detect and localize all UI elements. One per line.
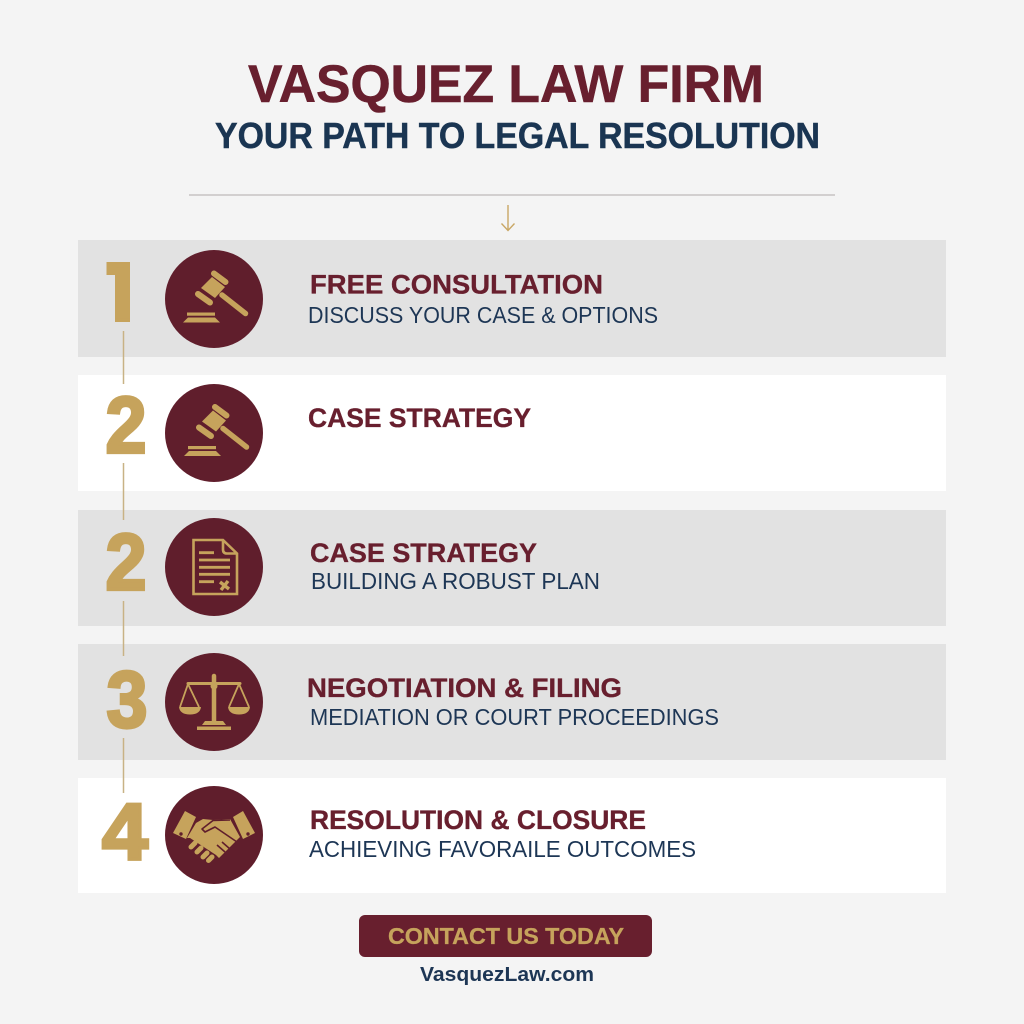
step number 1: 1 bbox=[96, 248, 140, 338]
panel: step 2 repeated bbox=[78, 510, 946, 626]
call to action button: CONTACT US TODAY bbox=[388, 923, 624, 949]
panel: step 4 bbox=[78, 778, 946, 893]
icon: gavel bbox=[165, 384, 263, 482]
panel: step 3 bbox=[78, 644, 946, 760]
icon: scales of justice bbox=[165, 653, 263, 751]
panel: step 1 bbox=[78, 240, 946, 357]
step 2 heading: CASE STRATEGY bbox=[308, 403, 531, 433]
header bbox=[189, 55, 835, 230]
icon: handshake bbox=[165, 786, 263, 884]
website: VasquezLaw.com bbox=[420, 963, 594, 986]
icon: gavel bbox=[165, 250, 263, 348]
step 2 description: BUILDING A ROBUST PLAN bbox=[311, 568, 600, 594]
title: VASQUEZ LAW FIRM bbox=[248, 55, 764, 114]
call to action button bbox=[359, 915, 652, 957]
infographic bbox=[78, 64, 946, 985]
step number 2: 2 bbox=[106, 380, 146, 470]
step number 2: 2 bbox=[106, 518, 146, 606]
step 2 heading: CASE STRATEGY bbox=[310, 538, 537, 568]
step number 1 bbox=[106, 262, 130, 322]
icon: document bbox=[165, 518, 263, 616]
subtitle: YOUR PATH TO LEGAL RESOLUTION bbox=[215, 115, 820, 156]
step 4 heading: RESOLUTION & CLOSURE bbox=[310, 805, 646, 835]
step 3 description: MEDIATION OR COURT PROCEEDINGS bbox=[310, 704, 719, 730]
step 4 description: ACHIEVING FAVORAILE OUTCOMES bbox=[309, 836, 696, 862]
step 1 heading: FREE CONSULTATION bbox=[310, 270, 603, 300]
step number 4: 4 bbox=[102, 787, 149, 876]
panel: step 2 bbox=[78, 375, 946, 491]
arrow: down bbox=[502, 205, 514, 230]
step 1 description: DISCUSS YOUR CASE & OPTIONS bbox=[308, 302, 658, 328]
step 3 heading: NEGOTIATION & FILING bbox=[307, 673, 622, 703]
step number 3: 3 bbox=[106, 655, 148, 744]
